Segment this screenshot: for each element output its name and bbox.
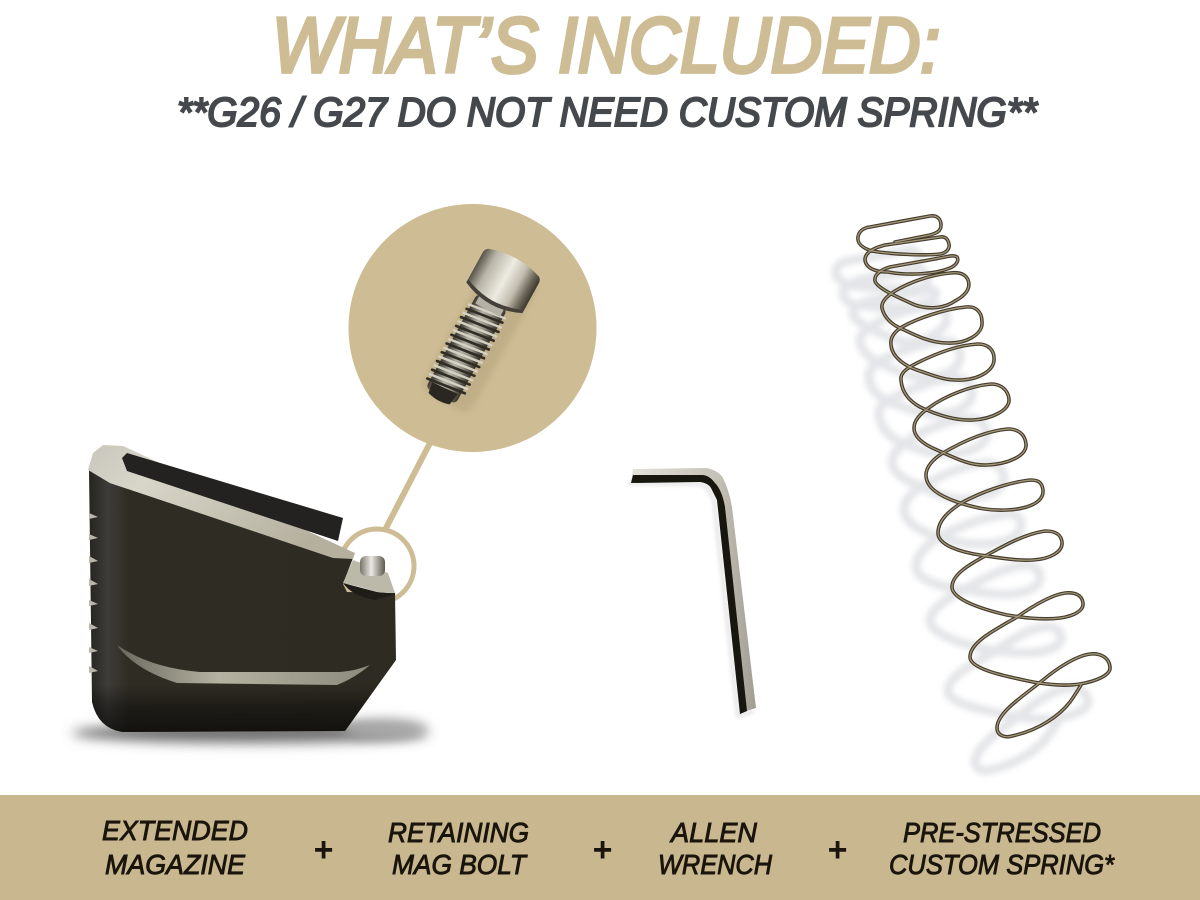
label: pre-stressed custom spring: PRE-STRESSED [903, 817, 1101, 848]
label: extended magazine: MAGAZINE [105, 849, 245, 880]
silver rim [88, 445, 355, 559]
grip notches [89, 513, 98, 673]
label: pre-stressed custom spring [889, 817, 1115, 880]
label: allen wrench [658, 817, 773, 880]
label: retaining mag bolt: MAG BOLT [392, 849, 528, 880]
label: pre-stressed custom spring: CUSTOM SPRING* [889, 849, 1115, 880]
swoosh [117, 645, 370, 685]
dark slot [122, 453, 343, 541]
label: extended magazine: EXTENDED [102, 815, 248, 846]
icon: extended magazine [72, 445, 428, 743]
bottom label band [0, 795, 1200, 900]
label: retaining mag bolt: RETAINING [388, 817, 529, 848]
plus sign: + [827, 831, 847, 869]
callout connector line and ring [340, 441, 431, 603]
spring shadow [836, 250, 1088, 771]
plus sign: + [592, 831, 612, 869]
magazine body [89, 470, 396, 732]
icon: custom spring [836, 216, 1110, 771]
spring wire [858, 216, 1110, 737]
title: WHAT’S INCLUDED: [272, 1, 940, 89]
label: allen wrench: ALLEN [669, 817, 758, 848]
subtitle: **G26 / G27 DO NOT NEED CUSTOM SPRING** [177, 89, 1039, 135]
label: retaining mag bolt [388, 817, 529, 880]
stud with pin [343, 556, 396, 600]
magazine ground shadow [72, 719, 428, 743]
icon: retaining mag bolt in circle [348, 204, 596, 452]
label: allen wrench: WRENCH [658, 849, 773, 880]
plus sign: + [313, 831, 333, 869]
icon: allen wrench [629, 468, 756, 716]
label: extended magazine [102, 815, 248, 880]
